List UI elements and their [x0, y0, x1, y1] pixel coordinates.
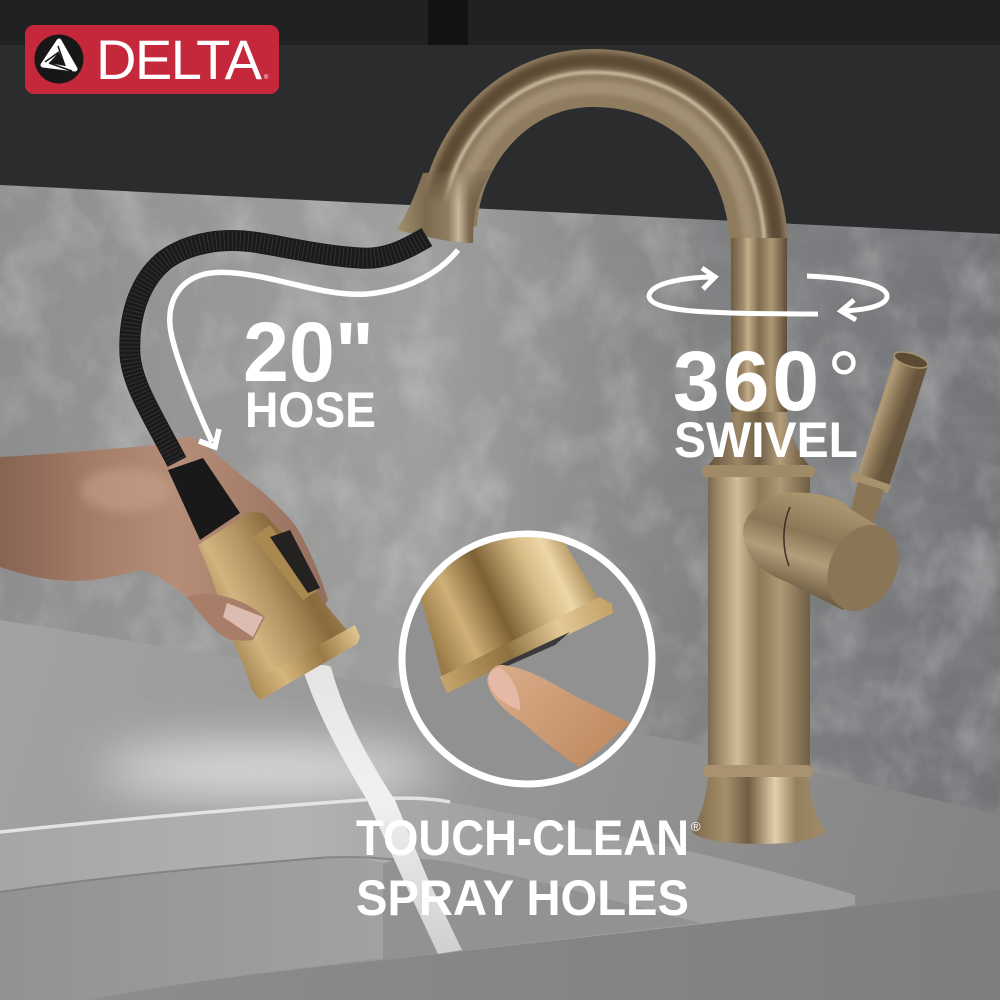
counter lip: [0, 798, 855, 960]
spray head: [198, 512, 360, 700]
thumb: [187, 594, 265, 641]
icon: Delta triangle mark: [34, 34, 84, 84]
bottom ring: [703, 765, 813, 778]
hose: [130, 237, 427, 462]
body: [708, 477, 810, 769]
handle lever: [849, 349, 930, 526]
marble backsplash: [0, 180, 1000, 830]
label: 20 inch hose: HOSE: [245, 382, 376, 438]
label: touch-clean spray holes: ®: [691, 819, 701, 834]
label: touch-clean spray holes: SPRAY HOLES: [356, 870, 689, 926]
inset spray head: [420, 530, 613, 693]
label: 360 swivel: 360°: [673, 334, 864, 428]
neck: [706, 412, 811, 468]
logo: Delta: ®: [264, 74, 269, 81]
spray button: [253, 525, 318, 600]
label: 20 inch hose: 20": [243, 305, 374, 399]
inset finger: [487, 665, 630, 767]
faucet: [397, 60, 930, 844]
logo: Delta: [25, 25, 279, 94]
base flare: [692, 777, 825, 844]
handle hub: [743, 492, 885, 610]
label: touch-clean spray holes: TOUCH-CLEAN: [356, 810, 689, 866]
logo: Delta: DELTA: [96, 28, 263, 91]
counter front: [90, 890, 1000, 1000]
dark wall: [0, 0, 1000, 240]
label: touch-clean spray holes: [356, 810, 701, 926]
touch-clean inset: [402, 530, 652, 784]
label: 360 swivel: SWIVEL: [674, 412, 858, 468]
hose arrow: [170, 250, 458, 447]
gooseneck spout: [397, 60, 777, 251]
top ring: [702, 465, 815, 478]
water stream: [303, 665, 462, 954]
far rim: [450, 858, 855, 923]
counter top: [0, 620, 1000, 1000]
sink basin: [0, 857, 383, 1000]
basin right wall: [383, 859, 700, 960]
lip highlight: [0, 798, 450, 832]
basin rim shadow: [0, 857, 400, 892]
hand back: [0, 437, 328, 640]
stem: [731, 238, 787, 414]
sink and counter front: [0, 798, 1000, 1000]
swivel arrows: [649, 268, 887, 320]
hose connector: [168, 458, 240, 540]
